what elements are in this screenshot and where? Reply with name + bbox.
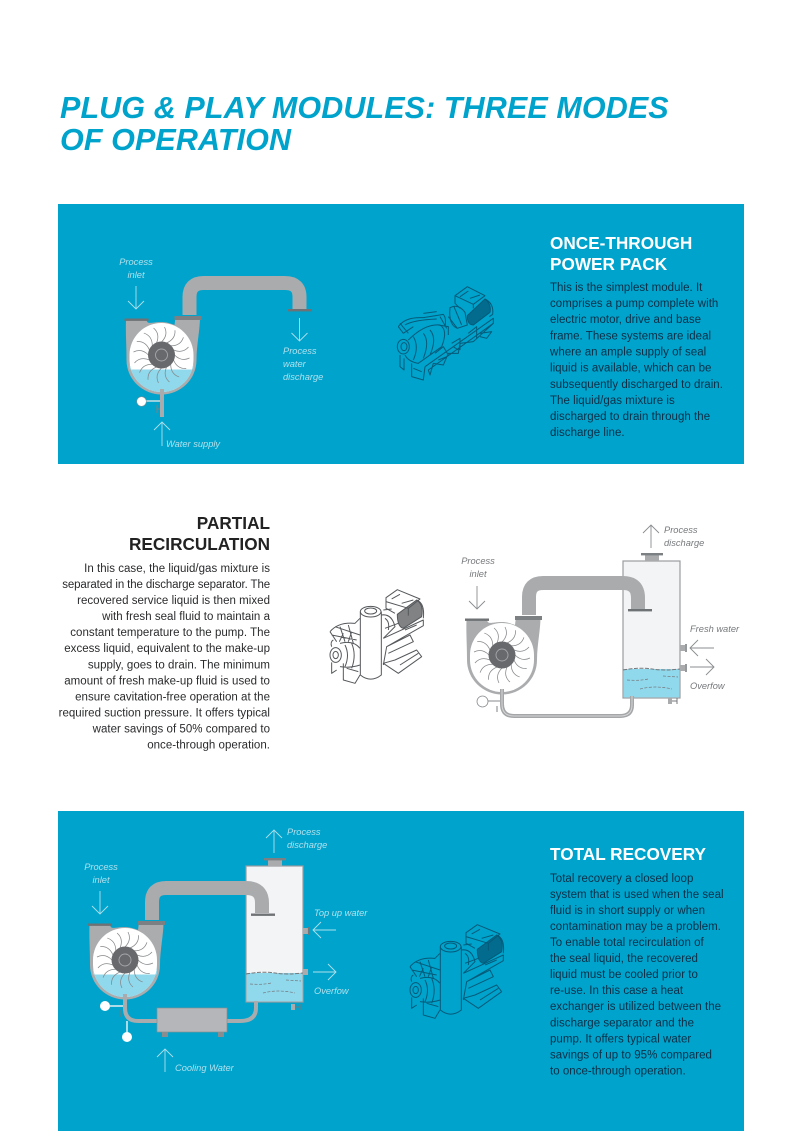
label: process inlet: Process xyxy=(84,862,118,872)
illustration: pump module with separator xyxy=(330,590,424,683)
body text: exchanger is utilized between the xyxy=(550,1001,721,1013)
label: process inlet: inlet xyxy=(469,569,487,579)
label: process inlet: Process xyxy=(119,257,153,267)
heading: ONCE-THROUGH xyxy=(550,233,692,253)
title: OF OPERATION xyxy=(60,123,292,157)
body text: savings of up to 95% compared xyxy=(550,1050,712,1062)
arrow: fresh water xyxy=(690,640,714,656)
arrow: process discharge xyxy=(643,525,659,548)
heading: PARTIAL xyxy=(197,513,270,533)
body text: the seal liquid, the recovered xyxy=(550,953,698,965)
body text: Total recovery a closed loop xyxy=(550,873,693,885)
label: cooling water: Cooling Water xyxy=(175,1063,235,1073)
label: process inlet: inlet xyxy=(92,875,110,885)
heading: POWER PACK xyxy=(550,254,668,274)
label: process inlet: inlet xyxy=(127,270,145,280)
diagram: once-through pump xyxy=(119,257,323,449)
label: overflow: Overfow xyxy=(314,986,350,996)
arrow: top up water xyxy=(313,922,336,938)
diagram: partial recirculation xyxy=(461,525,740,716)
body text: discharge line. xyxy=(550,427,625,439)
illustration: pump module with heat exchanger xyxy=(410,925,504,1018)
body text: to once-through operation. xyxy=(550,1066,686,1078)
discharge pipe xyxy=(190,283,300,315)
body text: pump. It offers typical water xyxy=(550,1034,691,1046)
return pipe and valve xyxy=(477,689,632,716)
body text: discharged to drain through the xyxy=(550,411,710,423)
label: process water discharge: Process xyxy=(283,346,317,356)
heading: TOTAL RECOVERY xyxy=(550,844,707,864)
body text: once-through operation. xyxy=(147,740,270,752)
body text: The liquid/gas mixture is xyxy=(550,395,675,407)
body text: discharge separator and the xyxy=(550,1018,694,1030)
illustration: pump module xyxy=(397,287,493,380)
body text: system that is used when the seal xyxy=(550,889,724,901)
panel: once-through power pack xyxy=(58,204,744,464)
arrow: water supply xyxy=(154,422,170,446)
body text: separated in the discharge separator. The xyxy=(62,579,270,591)
title: PLUG & PLAY MODULES: THREE MODES xyxy=(60,91,669,125)
arrow: process discharge xyxy=(266,830,282,853)
water supply valve xyxy=(137,389,164,417)
separator tank xyxy=(246,858,308,1010)
label: overflow: Overfow xyxy=(690,681,726,691)
arrow: overflow xyxy=(313,964,336,980)
body text: liquid must be cooled prior to xyxy=(550,969,698,981)
label: process inlet: Process xyxy=(461,556,495,566)
body text: constant temperature to the pump. The xyxy=(70,627,270,639)
body text: In this case, the liquid/gas mixture is xyxy=(84,563,270,575)
body text: amount of fresh make-up fluid is used to xyxy=(64,676,270,688)
body text: excess liquid, equivalent to the make-up xyxy=(64,643,270,655)
heat exchanger and pipes xyxy=(100,994,256,1042)
heading: RECIRCULATION xyxy=(129,534,270,554)
label: water supply: Water supply xyxy=(166,439,221,449)
label: process discharge: discharge xyxy=(287,840,327,850)
arrow: overflow xyxy=(690,659,714,675)
body text: re-use. In this case a heat xyxy=(550,985,684,997)
transfer pipe xyxy=(529,583,638,615)
body text: with fresh seal fluid to maintain a xyxy=(101,611,271,623)
panel: total recovery xyxy=(58,811,744,1131)
body text: recovered service liquid is then mixed xyxy=(77,595,270,607)
label: process water discharge: water xyxy=(283,359,307,369)
body text: This is the simplest module. It xyxy=(550,282,702,294)
pump casing xyxy=(465,616,542,694)
arrow: cooling water xyxy=(157,1049,173,1072)
body text: ensure cavitation-free operation at the xyxy=(75,692,270,704)
separator tank xyxy=(623,553,686,704)
body text: liquid is available, which can be xyxy=(550,362,711,374)
label: process discharge: Process xyxy=(664,525,698,535)
panel: partial recirculation xyxy=(59,513,740,752)
pump casing xyxy=(88,921,165,1000)
arrow: process inlet xyxy=(92,891,108,914)
body text: electric motor, drive and base xyxy=(550,314,701,326)
arrow: process inlet xyxy=(128,286,144,309)
body text: subsequently discharged to drain. xyxy=(550,379,723,391)
label: process water discharge: discharge xyxy=(283,372,323,382)
body text: required suction pressure. It offers typical xyxy=(59,708,270,720)
body text: To enable total recirculation of xyxy=(550,937,705,949)
body text: frame. These systems are ideal xyxy=(550,330,711,342)
body text: comprises a pump complete with xyxy=(550,298,718,310)
arrow: process inlet xyxy=(469,586,485,609)
body text: where an ample supply of seal xyxy=(549,346,706,358)
transfer pipe xyxy=(152,888,262,920)
body text: supply, goes to drain. The minimum xyxy=(88,660,270,672)
title xyxy=(60,91,669,157)
body text: water savings of 50% compared to xyxy=(92,724,270,736)
pump casing xyxy=(124,316,202,394)
arrow: process water discharge xyxy=(292,318,308,341)
label: top up water: Top up water xyxy=(314,908,368,918)
body text: fluid is in short supply or when xyxy=(550,905,705,917)
body text: contamination may be a problem. xyxy=(550,921,721,933)
diagram: total recovery xyxy=(84,827,368,1073)
label: process discharge: Process xyxy=(287,827,321,837)
label: fresh water: Fresh water xyxy=(690,624,740,634)
label: process discharge: discharge xyxy=(664,538,704,548)
